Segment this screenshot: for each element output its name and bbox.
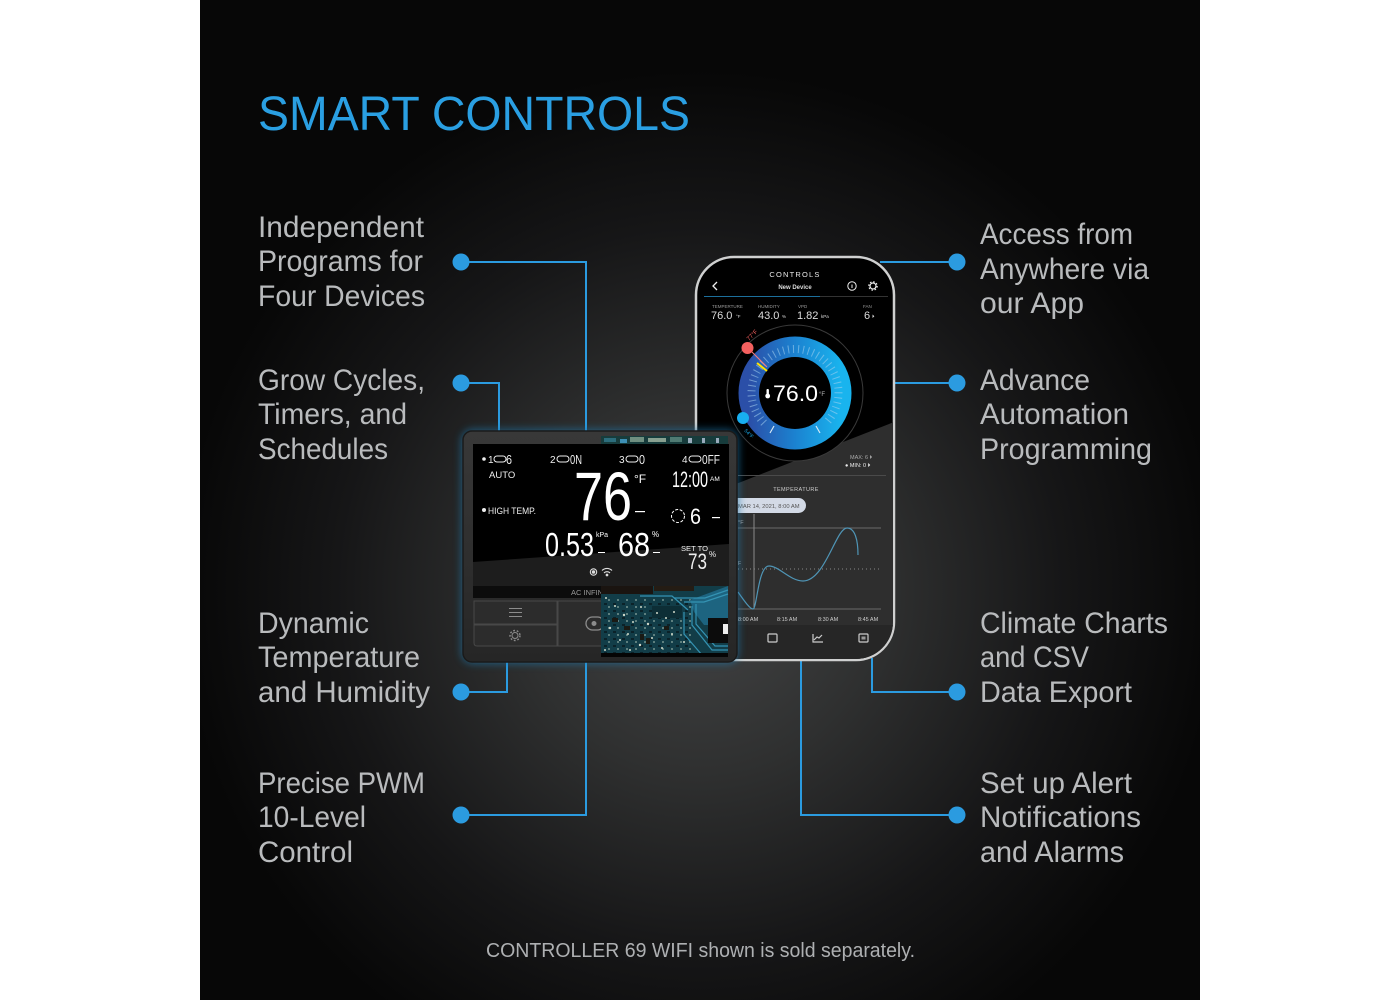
device body <box>463 431 737 662</box>
phone readings: ⏵ <box>872 314 875 320</box>
vpd and humidity: 68 <box>618 526 650 563</box>
feature: access from anywhere: our App <box>980 287 1084 320</box>
phone readings: 76.0 <box>711 310 732 322</box>
fan level: 6 <box>690 504 701 529</box>
phone <box>690 257 894 660</box>
channel row: 6 <box>506 452 512 467</box>
fan max min <box>845 455 873 469</box>
temperature dial <box>727 325 863 461</box>
chart: 8:30 AM <box>818 617 839 623</box>
device buttons <box>474 601 602 646</box>
phone header: CONTROLS <box>769 270 821 279</box>
feature: independent programs: Four Devices <box>258 280 425 313</box>
feature: access from anywhere <box>980 218 1149 320</box>
mode labels: HIGH TEMP. <box>488 506 536 517</box>
feature: dynamic temperature: Dynamic <box>258 607 369 640</box>
feature: automation: Advance <box>980 364 1090 397</box>
channel row: 0FF <box>702 452 720 467</box>
feature: dynamic temperature: Temperature <box>258 641 420 674</box>
temperature dial: 54°F <box>743 428 754 440</box>
chart: °F <box>738 520 744 526</box>
channel row: 4 <box>682 455 688 466</box>
brand strip: AC INFIN <box>571 588 603 597</box>
set to: SET TO <box>681 544 708 553</box>
phone readings: kPa <box>821 314 829 319</box>
device glow <box>461 429 739 664</box>
feature: dynamic temperature <box>258 607 430 709</box>
set to: 73 <box>688 549 707 574</box>
feature: automation <box>980 364 1152 466</box>
device screen <box>473 444 729 598</box>
chart: TEMPERATURE <box>773 487 819 493</box>
phone readings: 43.0 <box>758 310 779 322</box>
phone readings: 6 <box>864 310 870 322</box>
temperature reading: 76 <box>574 458 632 535</box>
feature: dynamic temperature: and Humidity <box>258 676 430 709</box>
chart: 8:45 AM <box>858 617 879 623</box>
feature: precise PWM <box>258 767 425 869</box>
channel row <box>482 452 720 467</box>
circuit board top strip <box>601 436 728 444</box>
vpd and humidity: % <box>652 530 659 539</box>
clock: AM <box>710 476 720 483</box>
feature: grow cycles: Schedules <box>258 433 388 466</box>
feature: precise PWM: Control <box>258 836 353 869</box>
feature: grow cycles: Timers, and <box>258 398 407 431</box>
feature: grow cycles: Grow Cycles, <box>258 364 425 397</box>
channel row: 0N <box>570 452 582 467</box>
temperature dial: 76.0 <box>773 381 818 406</box>
chart: 8:00 AM <box>738 617 759 623</box>
feature: access from anywhere: Access from <box>980 218 1133 251</box>
set to: % <box>709 550 716 559</box>
fan level <box>672 504 720 529</box>
connector dots <box>452 254 966 824</box>
feature: independent programs: Independent <box>258 211 425 244</box>
feature: alerts: Set up Alert <box>980 767 1133 800</box>
mode labels: AUTO <box>489 470 515 481</box>
channel row: 2 <box>550 455 556 466</box>
temperature reading: °F <box>634 472 646 486</box>
chart: 8:15 AM <box>777 617 798 623</box>
phone readings: °F <box>736 314 741 319</box>
temperature dial: °F <box>819 392 825 398</box>
channel row: 0 <box>639 452 645 467</box>
phone readings: TEMPERTURE <box>712 304 743 309</box>
clock: 12:00 <box>672 467 708 492</box>
phone readings: FAN <box>863 304 872 309</box>
vpd and humidity <box>545 526 660 563</box>
feature: access from anywhere: Anywhere via <box>980 253 1149 286</box>
background panel <box>200 0 1200 1000</box>
feature: climate charts: Data Export <box>980 676 1133 709</box>
feature: climate charts <box>980 607 1168 709</box>
feature: alerts <box>980 767 1141 869</box>
phone lower panel <box>736 422 893 659</box>
chart: MAR 14, 2021, 8:00 AM <box>738 504 800 510</box>
button icons <box>509 608 604 640</box>
fan max min: ● MIN: 0 ⏵ <box>845 463 871 469</box>
phone readings: HUMIDITY <box>758 304 780 309</box>
phone header <box>704 270 888 297</box>
feature: climate charts: Climate Charts <box>980 607 1168 640</box>
phone readings: % <box>782 314 786 319</box>
feature: automation: Programming <box>980 433 1152 466</box>
feature: climate charts: and CSV <box>980 641 1089 674</box>
set to <box>681 544 716 574</box>
footnote: CONTROLLER 69 WIFI shown is sold separately. <box>486 940 915 962</box>
title: SMART CONTROLS <box>258 88 690 141</box>
connector lines <box>461 262 957 815</box>
channel row: 3 <box>619 455 625 466</box>
feature: grow cycles <box>258 364 425 466</box>
controller device <box>461 429 739 664</box>
phone readings: VPD <box>798 304 808 309</box>
phone header: New Device <box>778 285 812 291</box>
phone readings: 1.82 <box>797 310 818 322</box>
feature: precise PWM: Precise PWM <box>258 767 425 800</box>
phone readings <box>711 304 875 322</box>
chart: F <box>738 561 741 567</box>
circuit board photo <box>601 586 728 657</box>
feature: independent programs <box>258 211 425 313</box>
feature: independent programs: Programs for <box>258 245 423 278</box>
fan max min: MAX: 6 ⏵ <box>850 455 873 461</box>
feature: alerts: Notifications <box>980 801 1141 834</box>
vpd and humidity: kPa <box>596 532 608 539</box>
vpd and humidity: 0.53 <box>545 526 594 563</box>
feature: automation: Automation <box>980 398 1129 431</box>
channel row: 1 <box>488 455 494 466</box>
chart <box>715 475 886 623</box>
temperature dial: 77°F <box>746 329 760 342</box>
phone tab bar icons <box>768 634 868 642</box>
feature: alerts: and Alarms <box>980 836 1124 869</box>
status icons <box>590 568 612 576</box>
feature: precise PWM: 10-Level <box>258 801 366 834</box>
mode labels <box>482 470 536 517</box>
